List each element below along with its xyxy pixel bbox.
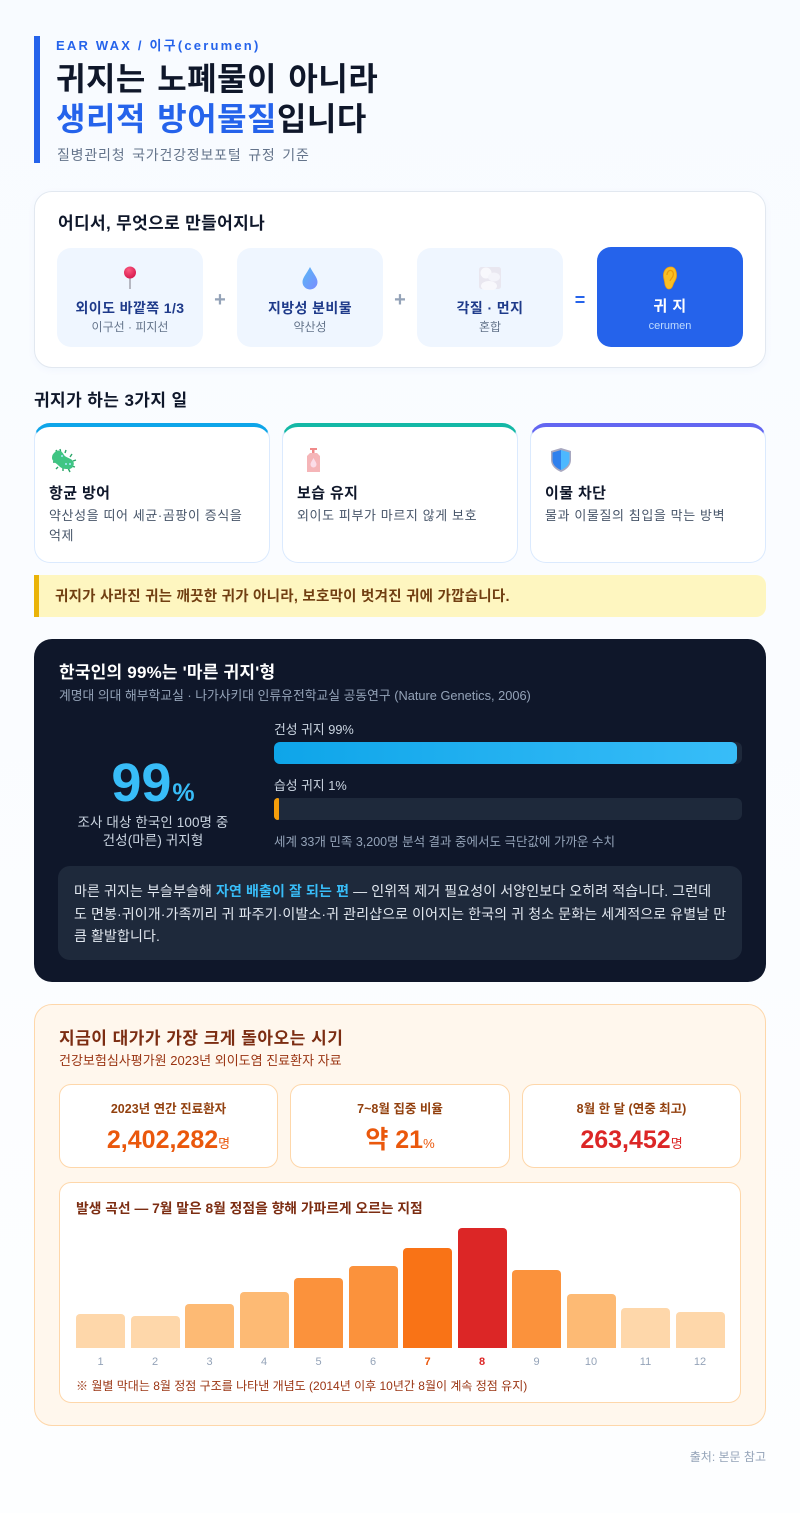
stat: july-august share <box>290 1084 510 1168</box>
card text <box>49 508 242 543</box>
heading: 어디서, 무엇으로 만들어지나 <box>58 214 265 233</box>
big stat caption: 건성(마른) 귀지형 <box>103 833 203 848</box>
panel source: 계명대 의대 해부학교실 · 나가사키대 인류유전학교실 공동연구 (Nature Genetics, 2006) <box>59 688 531 703</box>
stat value: 2,402,282명 <box>107 1126 230 1154</box>
title <box>56 61 378 137</box>
stat: august peak <box>522 1084 741 1168</box>
card: moisture <box>282 423 518 563</box>
callout <box>34 575 766 617</box>
header <box>34 36 434 163</box>
sublabel: 혼합 <box>479 320 501 334</box>
bar: dry 99 percent <box>274 742 742 764</box>
panel title: 한국인의 99%는 '마른 귀지'형 <box>59 663 275 682</box>
bar label: wet: 습성 귀지 1% <box>274 778 347 793</box>
card text: 약산성을 띠어 세균·곰팡이 증식을 <box>49 508 242 523</box>
panel: composition <box>34 191 766 368</box>
card text: 외이도 피부가 마르지 않게 보호 <box>297 508 477 523</box>
chart note: ※ 월별 막대는 8월 정점 구조를 나타낸 개념도 (2014년 이후 10년간 8월이 계속 정점 유지) <box>76 1379 527 1393</box>
month labels <box>97 1356 706 1368</box>
box: sebum <box>237 248 383 347</box>
panel: dry ear wax <box>34 639 766 982</box>
explanation box: 도 면봉·귀이개·가족끼리 귀 파주기·이발소·귀 관리샵으로 이어지는 한국의 귀 청소 문화는 세계적으로 유별날 만 <box>74 906 726 922</box>
month labels: 9 <box>533 1356 540 1368</box>
title: 귀지는 노폐물이 아니라 <box>56 61 378 97</box>
box: outer third <box>57 248 203 347</box>
card text: 억제 <box>49 528 74 543</box>
icon: shield <box>551 448 571 472</box>
month labels: 5 <box>315 1356 322 1368</box>
icon: pin <box>124 266 136 289</box>
bar: wet 1 percent <box>274 798 742 820</box>
icon: flakes <box>479 267 501 290</box>
box: ear wax result <box>597 247 743 347</box>
card: barrier <box>530 423 766 563</box>
card text: 물과 이물질의 침입을 막는 방벽 <box>545 508 725 523</box>
big stat: 99% <box>111 753 195 813</box>
month labels: 11 <box>640 1356 651 1368</box>
callout: 귀지가 사라진 귀는 깨끗한 귀가 아니라, 보호막이 벗겨진 귀에 가깝습니다. <box>55 589 510 605</box>
month labels: 4 <box>261 1356 267 1368</box>
label: 귀 지 <box>653 298 687 315</box>
stat: annual patients <box>59 1084 278 1168</box>
card: antibacterial <box>34 423 270 563</box>
stat value: 263,452명 <box>580 1126 683 1154</box>
icon: lotion bottle <box>307 448 320 472</box>
plus: + <box>214 289 226 311</box>
panel title: 지금이 대가가 가장 크게 돌아오는 시기 <box>59 1029 343 1048</box>
month labels: 10 <box>585 1356 597 1368</box>
eyebrow: EAR WAX / 이구(cerumen) <box>56 38 260 53</box>
plus: + <box>394 289 406 311</box>
month labels: 7 <box>424 1356 431 1368</box>
explanation box: 큼 활발합니다. <box>74 928 160 944</box>
bar label: dry: 건성 귀지 99% <box>274 722 354 737</box>
stat value: 약 21% <box>365 1126 435 1154</box>
label: 외이도 바깥쪽 1/3 <box>76 300 184 316</box>
title: 생리적 방어물질입니다 <box>56 101 367 137</box>
sublabel: 약산성 <box>293 320 327 334</box>
icon: microbe <box>52 448 76 472</box>
month labels: 6 <box>370 1356 376 1368</box>
stat label: 7~8월 집중 비율 <box>357 1102 443 1116</box>
big stat caption <box>78 815 228 848</box>
equals: = <box>575 290 585 310</box>
stat label: 8월 한 달 (연중 최고) <box>577 1102 686 1116</box>
panel: seasonal timing <box>34 1004 766 1426</box>
card title: 보습 유지 <box>297 485 358 502</box>
card title: 항균 방어 <box>49 485 110 502</box>
card title: 이물 차단 <box>545 485 606 502</box>
box: keratin and dust <box>417 248 563 347</box>
explanation box: 마른 귀지는 부슬부슬해 자연 배출이 잘 되는 편 — 인위적 제거 필요성이 서양인보다 오히려 적습니다. 그런데 <box>74 883 711 899</box>
label: 지방성 분비물 <box>268 300 352 316</box>
month labels: 3 <box>206 1356 213 1368</box>
panel source: 건강보험심사평가원 2023년 외이도염 진료환자 자료 <box>59 1053 342 1068</box>
chart title: 발생 곡선 — 7월 말은 8월 정점을 향해 가파르게 오르는 지점 <box>76 1201 423 1216</box>
chart panel <box>59 1182 741 1403</box>
bar note: 세계 33개 민족 3,200명 분석 결과 중에서도 극단값에 가까운 수치 <box>274 835 615 849</box>
sublabel: cerumen <box>649 320 691 332</box>
source footer: 출처: 본문 참고 <box>690 1450 766 1464</box>
icon: ear <box>663 266 677 290</box>
sublabel: 이구선 · 피지선 <box>92 320 168 334</box>
bar chart <box>76 1228 725 1348</box>
month labels: 2 <box>152 1356 158 1368</box>
big stat caption: 조사 대상 한국인 100명 중 <box>78 815 228 830</box>
label: 각질 · 먼지 <box>457 300 523 316</box>
month labels: 1 <box>97 1356 104 1368</box>
subtitle: 질병관리청 국가건강정보포털 규정 기준 <box>57 147 310 163</box>
month labels: 8 <box>479 1356 485 1368</box>
icon: droplet <box>302 267 318 290</box>
month labels: 12 <box>694 1356 706 1368</box>
section heading: three jobs: 귀지가 하는 3가지 일 <box>34 391 188 410</box>
stat label: 2023년 연간 진료환자 <box>111 1102 226 1116</box>
explanation box <box>58 866 742 960</box>
